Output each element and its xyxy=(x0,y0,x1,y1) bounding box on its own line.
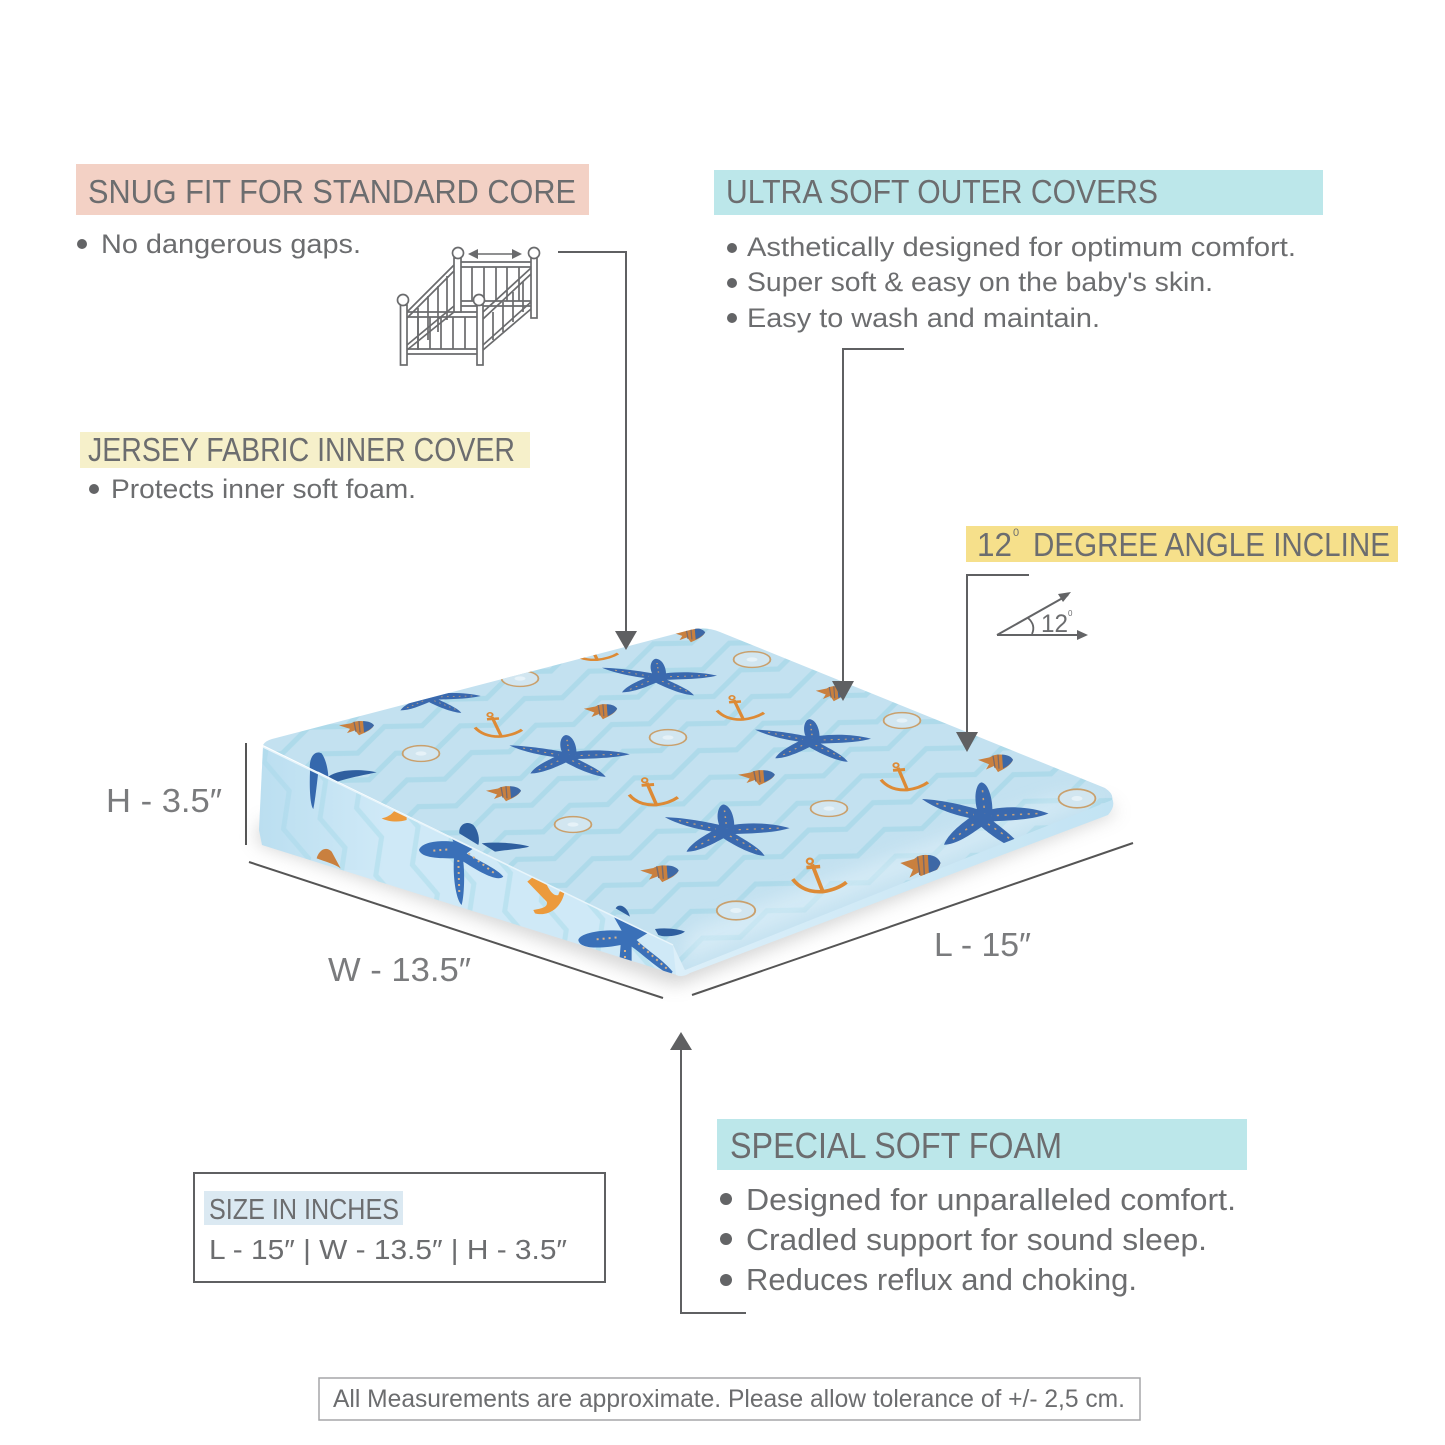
text block: ultra soft bullets: Asthetically designed for optimum comfort. xyxy=(747,232,1296,262)
text block: ultra soft bullets: Super soft & easy on the baby's skin. xyxy=(747,267,1213,297)
panel: size in inches: SIZE IN INCHES xyxy=(209,1194,399,1226)
print: anchors xyxy=(475,638,928,892)
heading: incline: 0 xyxy=(1013,527,1019,539)
heading: incline: DEGREE ANGLE INCLINE xyxy=(1033,526,1390,563)
text block: ultra soft bullets: Easy to wash and maintain. xyxy=(747,303,1100,333)
text block: ultra soft bullets xyxy=(727,232,1296,333)
heading: ultra soft: ULTRA SOFT OUTER COVERS xyxy=(726,173,1158,210)
heading: snug fit: SNUG FIT FOR STANDARD CORE xyxy=(88,173,576,210)
heading: soft foam xyxy=(717,1119,1247,1170)
cushion thin front edge xyxy=(673,798,1113,976)
text block: soft foam bullets: Cradled support for sound sleep. xyxy=(746,1222,1207,1257)
icon: angle 12 degrees: 0 xyxy=(1068,609,1073,618)
icon: angle 12 degrees xyxy=(997,592,1088,640)
icon: crib xyxy=(398,248,540,365)
dimension: length: L - 15″ xyxy=(934,926,1031,963)
cushion side face xyxy=(259,748,676,975)
text block: snug fit bullet: No dangerous gaps. xyxy=(101,229,361,259)
heading: soft foam: SPECIAL SOFT FOAM xyxy=(730,1125,1062,1166)
heading: jersey fabric: JERSEY FABRIC INNER COVER xyxy=(88,431,515,468)
cushion shadow xyxy=(256,800,1118,985)
dimension: width xyxy=(249,862,663,998)
arrow: snug fit connector xyxy=(558,252,637,650)
print: side-wrapped star arms xyxy=(275,752,685,936)
text block: soft foam bullets: Reduces reflux and choking. xyxy=(746,1262,1137,1297)
arrow: soft foam connector xyxy=(670,1032,746,1313)
side print xyxy=(310,752,673,975)
cushion top face xyxy=(250,620,1130,980)
product: wedge cushion xyxy=(250,620,1130,980)
dimension: width: W - 13.5″ xyxy=(328,951,471,988)
heading: incline: 12 xyxy=(977,526,1012,563)
dimension: height xyxy=(106,743,246,845)
footnote xyxy=(319,1378,1140,1420)
icon: angle 12 degrees: 12 xyxy=(1041,610,1068,638)
arrow: outer cover connector xyxy=(832,349,904,701)
text block: soft foam bullets: Designed for unparalleled comfort. xyxy=(746,1182,1236,1217)
dimension: length xyxy=(692,843,1133,995)
heading: snug fit xyxy=(76,164,589,215)
print: ship wheels xyxy=(403,652,1095,920)
dimension: height: H - 3.5″ xyxy=(106,782,222,819)
panel: size in inches xyxy=(194,1173,605,1282)
arrow: incline connector xyxy=(956,575,1029,752)
text block: soft foam bullets xyxy=(720,1182,1236,1297)
print: starfish xyxy=(383,659,1048,856)
panel: size in inches: L - 15″ | W - 13.5″ | H - 3.5″ xyxy=(209,1234,567,1265)
heading: ultra soft xyxy=(714,170,1323,215)
print: fish xyxy=(339,628,1013,882)
text block: jersey bullet: Protects inner soft foam. xyxy=(111,474,416,504)
footnote: All Measurements are approximate. Please allow tolerance of +/- 2,5 cm. xyxy=(333,1385,1125,1413)
